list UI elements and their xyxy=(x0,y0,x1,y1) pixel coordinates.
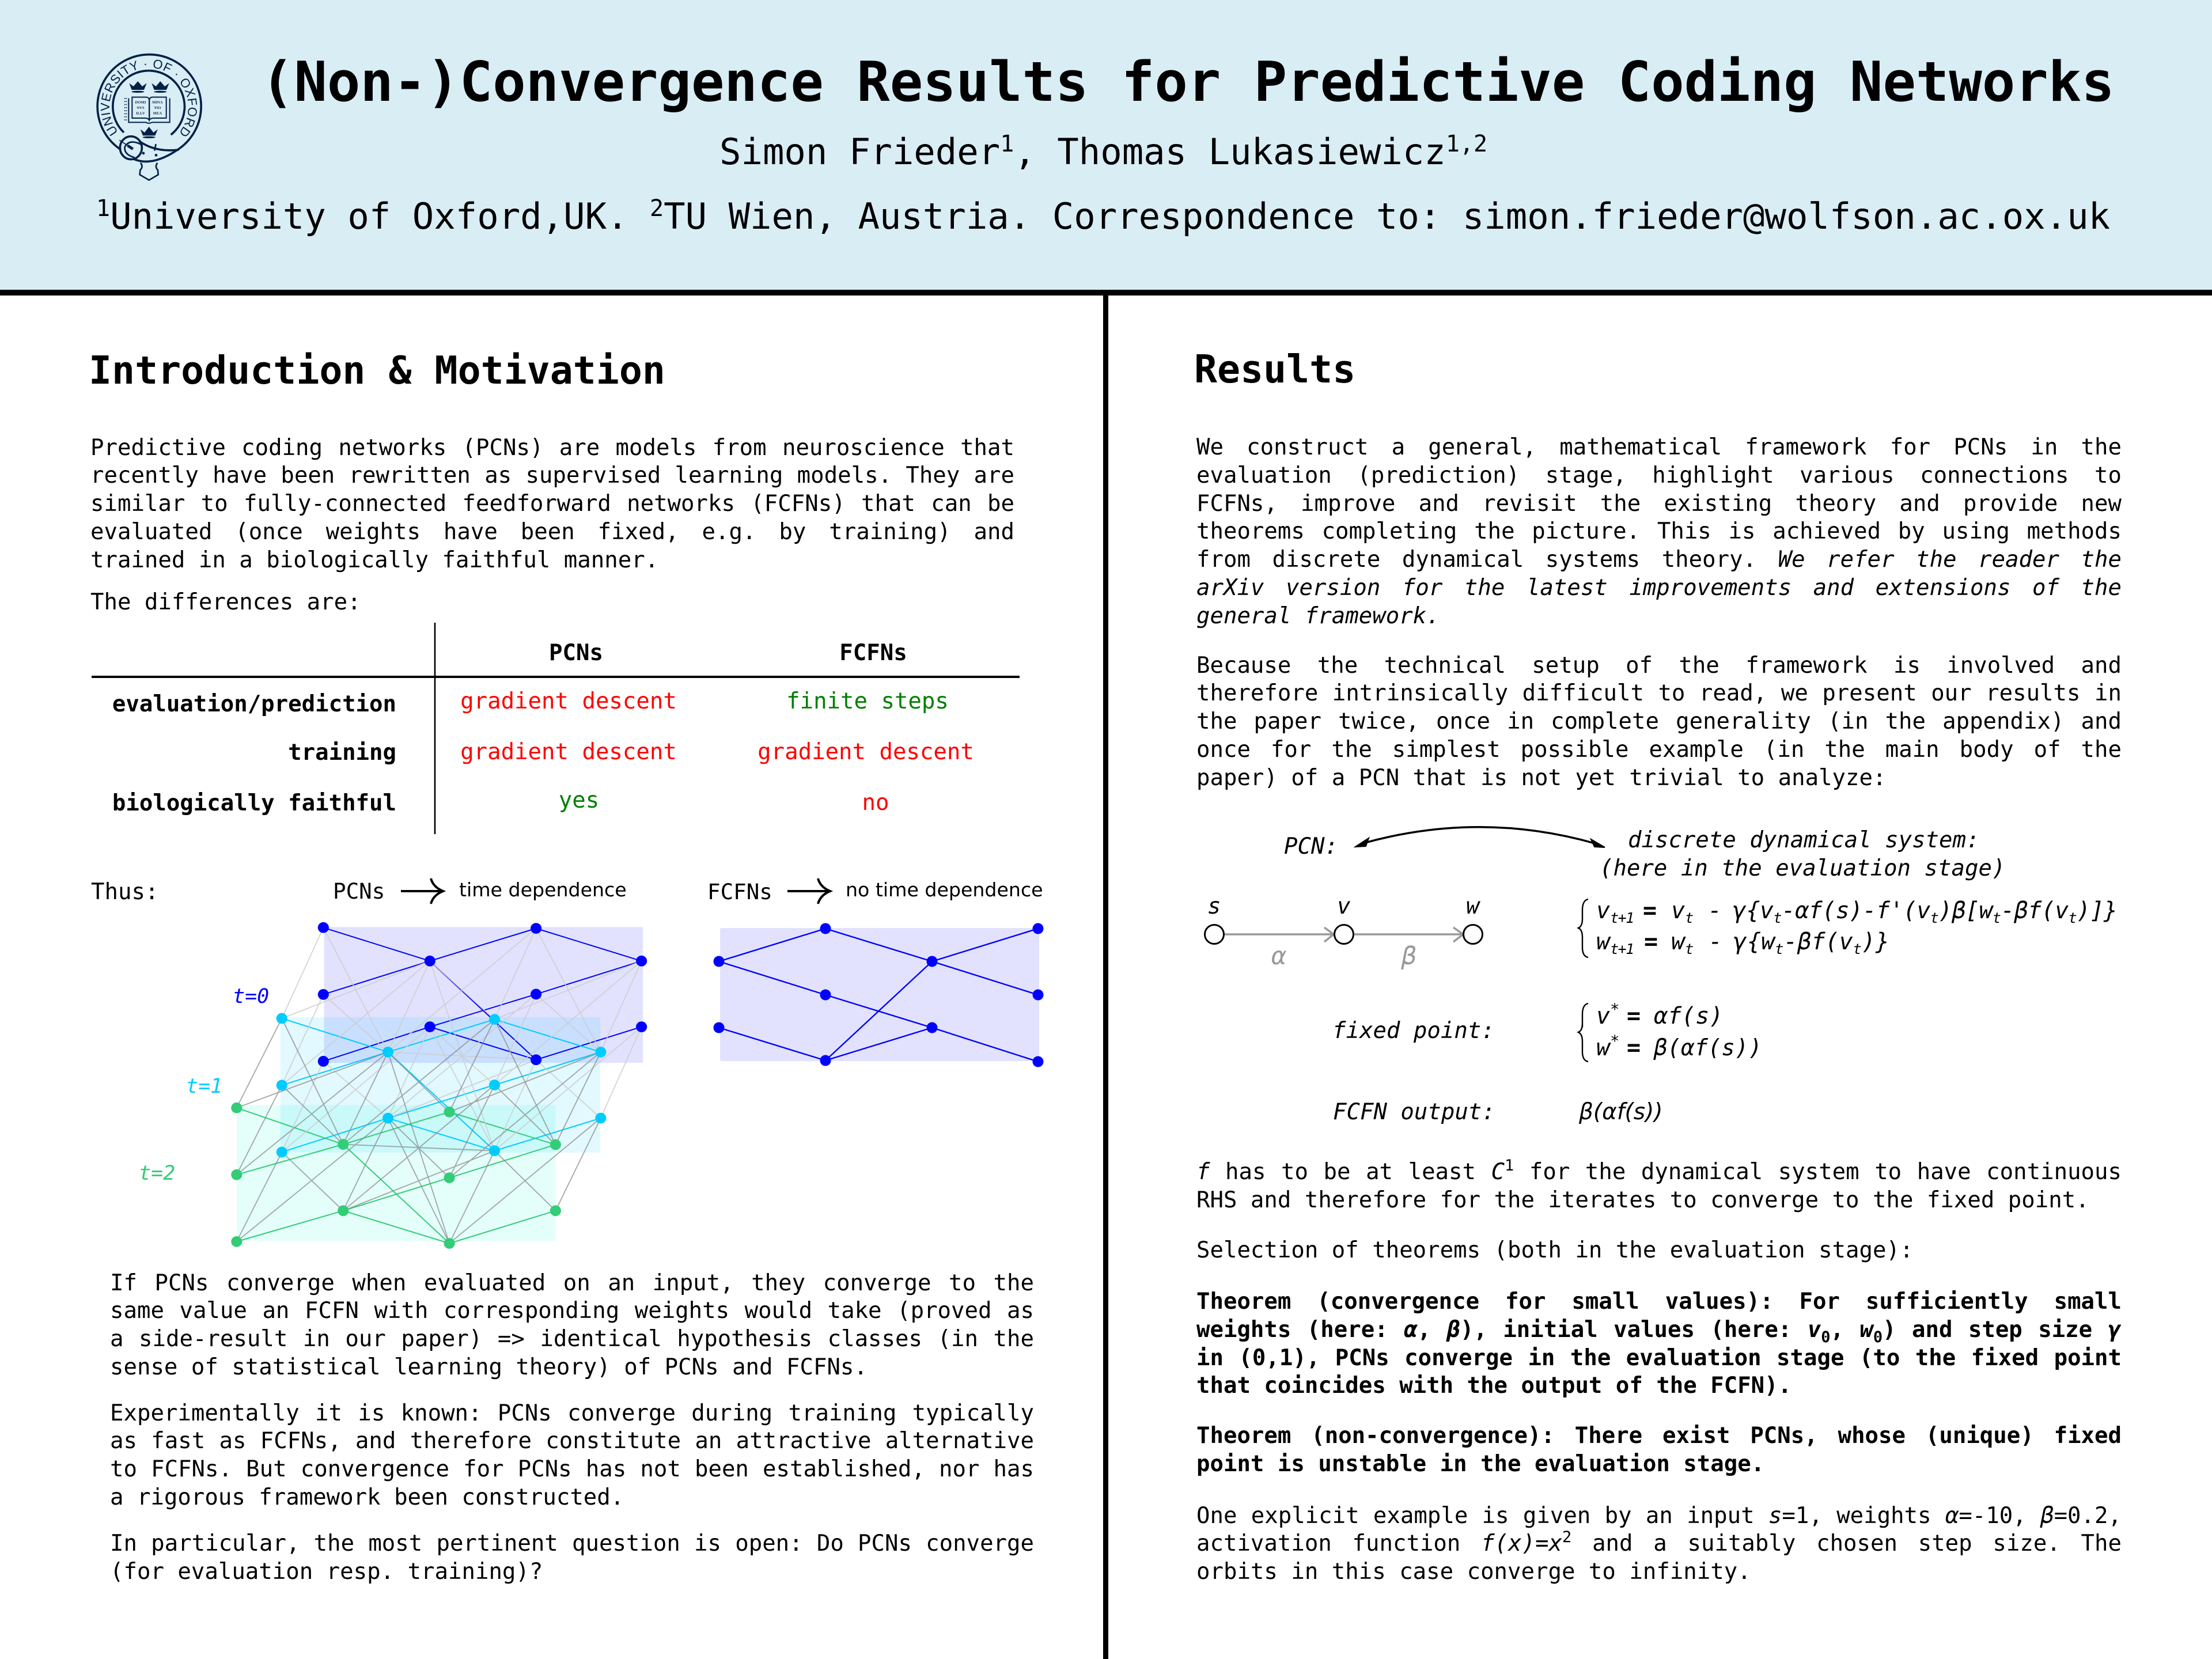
text block: identical hypothesis classes xyxy=(110,1270,1034,1380)
text block: differences intro: The differences are: xyxy=(90,589,361,615)
vertical divider xyxy=(1103,296,1108,1659)
equations: dynamical system update: -βf(v xyxy=(2001,897,2069,924)
equations: fixed point: w xyxy=(1596,1035,1610,1061)
text block: framework summary: theorems completing the picture. This is achieved by using methods xyxy=(1196,518,2122,544)
table: differences between PCNs and FCFNs: gradient descent xyxy=(460,739,677,765)
text block: framework summary: We construct a general, mathematical framework for PCNs in the xyxy=(1196,434,2122,460)
text block: experimental knowledge: a rigorous framework been constructed. xyxy=(110,1484,624,1510)
header banner xyxy=(0,0,2212,290)
authors: 1 xyxy=(1000,131,1014,157)
label: FCFNs no time dependence with arrow: FCFNs xyxy=(707,879,772,904)
logo: University of Oxford crest xyxy=(96,53,202,181)
equations: fixed point: = xyxy=(1627,1035,1641,1061)
equations: dynamical system update: w xyxy=(1671,929,1685,955)
diagram: PCN to discrete dynamical system: PCN: xyxy=(1284,834,1338,859)
diagram: s-v-w chain xyxy=(1205,893,1483,971)
text block: identical hypothesis classes: a side-result in our paper) => identical hypothesis classes (in the xyxy=(110,1326,1034,1352)
text block: technical setup: the paper twice, once in complete generality (in the appendix) and xyxy=(1196,709,2122,734)
equations: fixed point: * xyxy=(1610,1032,1619,1050)
text block: theorem convergence: that coincides with the output of the FCFN). xyxy=(1196,1373,1791,1399)
text block: technical setup xyxy=(1196,652,2122,791)
equations: dynamical system update: t xyxy=(1853,941,1862,957)
equations: dynamical system update: t xyxy=(1930,910,1939,926)
text block: experimental knowledge xyxy=(110,1400,1034,1510)
text block: technical setup: therefore intrinsically difficult to read, we present our results in xyxy=(1196,680,2122,706)
chart: PCN network unrolled in time: t=2 xyxy=(139,1162,175,1185)
text block: open question: In particular, the most pertinent question is open: Do PCNs converge xyxy=(110,1531,1034,1556)
label: PCNs time dependence with arrow: PCNs xyxy=(333,878,385,904)
equations: dynamical system update: t xyxy=(1773,910,1782,926)
text block: identical hypothesis classes: same value an FCFN with corresponding weights would take (proved as xyxy=(110,1298,1034,1324)
heading: results: Results xyxy=(1194,347,1355,392)
text block: C1 condition: RHS and therefore for the iterates to converge to the fixed point. xyxy=(1196,1187,2089,1213)
equations: dynamical system update: -αf(s)-f'(v xyxy=(1782,897,1930,924)
text block: C1 condition xyxy=(1196,1157,2122,1213)
panel: results xyxy=(1194,347,2122,1585)
label: FCFNs no time dependence with arrow xyxy=(707,878,1043,904)
table: differences between PCNs and FCFNs: gradient descent xyxy=(460,688,677,714)
table: differences between PCNs and FCFNs: training xyxy=(288,740,396,766)
table: differences between PCNs and FCFNs: gradient descent xyxy=(757,739,974,765)
equations: dynamical system update: t xyxy=(2069,910,2077,926)
table: differences between PCNs and FCFNs xyxy=(92,623,1020,834)
text block: open question xyxy=(110,1531,1034,1585)
affiliations: University of Oxford,UK. xyxy=(110,195,650,237)
text block: theorem non-convergence: Theorem (non-convergence): There exist PCNs, whose (unique) fixed xyxy=(1196,1423,2122,1449)
equations: fixed point: = xyxy=(1627,1003,1641,1029)
table: differences between PCNs and FCFNs: FCFNs xyxy=(839,640,907,666)
equations: dynamical system update: t xyxy=(1993,910,2001,926)
equations: dynamical system update xyxy=(1578,897,2118,957)
diagram: s-v-w chain: β xyxy=(1401,942,1416,971)
text block: intro paragraph: evaluated (once weights have been fixed, e.g. by training) and xyxy=(90,519,1014,545)
equations: dynamical system update: = xyxy=(1643,897,1657,924)
equation: FCFN output xyxy=(1333,1099,1663,1125)
equations: dynamical system update: w xyxy=(1596,929,1610,955)
text block: technical setup: paper) of a PCN that is not yet trivial to analyze: xyxy=(1196,765,1886,791)
logo: University of Oxford crest: DOMI xyxy=(135,101,146,105)
equations: dynamical system update: γ{v xyxy=(1733,897,1774,924)
equations: fixed point xyxy=(1332,1001,1762,1062)
logo: University of Oxford crest: UNIVERSITY · OF · OXFORD xyxy=(100,60,197,136)
equations: dynamical system update: )]} xyxy=(2077,897,2118,924)
text block: framework summary: evaluation (prediction) stage, highlight various connections to xyxy=(1196,463,2122,488)
logo: University of Oxford crest: TIO xyxy=(154,106,161,110)
text block: framework summary xyxy=(1196,434,2122,629)
equation: FCFN output: β(αf(s)) xyxy=(1578,1099,1663,1125)
text block: theorem convergence xyxy=(1196,1289,2122,1399)
text block: experimental knowledge: Experimentally it is known: PCNs converge during training typically xyxy=(110,1400,1034,1426)
table: differences between PCNs and FCFNs: evaluation/prediction xyxy=(112,691,396,717)
diagram: s-v-w chain: w xyxy=(1466,893,1481,919)
text block: framework summary: arXiv version for the latest improvements and extensions of the xyxy=(1196,575,2122,601)
chart: FCFN network xyxy=(713,923,1044,1067)
text block: theorem convergence: Theorem (convergence for small values): For sufficiently small xyxy=(1196,1289,2122,1315)
logo: University of Oxford crest: NVS xyxy=(137,106,145,110)
equations: fixed point: fixed point: xyxy=(1332,1018,1495,1044)
text block: theorem non-convergence xyxy=(1196,1423,2122,1477)
equations: fixed point: β(αf(s)) xyxy=(1653,1035,1762,1061)
text block: framework summary: general framework. xyxy=(1196,603,1440,629)
panel: introduction and motivation xyxy=(89,348,1044,1585)
affiliations: TU Wien, Austria. Correspondence to: simon.frieder@wolfson.ac.ox.uk xyxy=(664,195,2110,237)
text block: C1 condition: f has to be at least C1 for the dynamical system to have continuous xyxy=(1196,1157,2122,1185)
equations: dynamical system update: γ{w xyxy=(1733,929,1775,955)
diagram: PCN to discrete dynamical system: (here in the evaluation stage) xyxy=(1600,855,2005,881)
chart: PCN network unrolled in time: t=1 xyxy=(186,1075,222,1098)
diagram: PCN to discrete dynamical system: discrete dynamical system: xyxy=(1628,827,1979,853)
equations: dynamical system update: t+1 xyxy=(1610,910,1634,926)
equations: fixed point: v xyxy=(1596,1003,1610,1029)
label: FCFNs no time dependence with arrow: no time dependence xyxy=(846,878,1043,901)
text block: technical setup: once for the simplest possible example (in the main body of the xyxy=(1196,737,2122,763)
text block: experimental knowledge: to FCFNs. But convergence for PCNs has not been established, nor has xyxy=(110,1456,1034,1482)
equations: dynamical system update: - xyxy=(1708,897,1722,924)
text block: experimental knowledge: as fast as FCFNs, and therefore constitute an attractive alternative xyxy=(110,1428,1034,1454)
label: PCNs time dependence with arrow xyxy=(333,878,627,904)
text block: intro paragraph: recently have been rewritten as supervised learning models. They are xyxy=(90,463,1014,488)
diagram: PCN to discrete dynamical system xyxy=(1284,827,2005,881)
equations: dynamical system update: t xyxy=(1685,910,1694,926)
equations: dynamical system update: = xyxy=(1644,929,1658,955)
text block: identical hypothesis classes: If PCNs converge when evaluated on an input, they converge to the xyxy=(110,1270,1034,1296)
table: differences between PCNs and FCFNs: finite steps xyxy=(786,688,949,714)
label: PCNs time dependence with arrow: time dependence xyxy=(459,878,627,901)
text block: explicit example: orbits in this case converge to infinity. xyxy=(1196,1559,1751,1585)
equations: dynamical system update: t xyxy=(1775,941,1783,957)
chart: PCN network unrolled in time xyxy=(139,922,647,1249)
diagram: s-v-w chain: s xyxy=(1207,893,1221,919)
equation: FCFN output: FCFN output: xyxy=(1333,1099,1495,1125)
horizontal divider xyxy=(0,290,2212,296)
table: differences between PCNs and FCFNs: no xyxy=(862,790,889,816)
equations: dynamical system update: v xyxy=(1671,897,1685,924)
text block: selection of theorems: Selection of theorems (both in the evaluation stage): xyxy=(1196,1237,1913,1263)
table: differences between PCNs and FCFNs: PCNs xyxy=(549,640,603,666)
authors: , Thomas Lukasiewicz xyxy=(1014,131,1446,173)
text block: theorem non-convergence: point is unstable in the evaluation stage. xyxy=(1196,1451,1764,1477)
equations: dynamical system update: )β[w xyxy=(1938,897,1994,924)
text block: framework summary: from discrete dynamical systems theory. We refer the reader the xyxy=(1196,547,2122,573)
equations: dynamical system update: t+1 xyxy=(1610,941,1634,957)
text block: explicit example xyxy=(1196,1502,2122,1585)
diagram: s-v-w chain: α xyxy=(1271,942,1287,971)
authors: Simon Frieder xyxy=(719,131,1000,173)
equations: dynamical system update: - xyxy=(1709,929,1722,955)
equations: fixed point: αf(s) xyxy=(1654,1003,1723,1029)
chart: PCN network unrolled in time: t=0 xyxy=(233,985,269,1008)
text block: intro paragraph xyxy=(90,434,1014,573)
equations: dynamical system update: v xyxy=(1596,897,1610,924)
equations: dynamical system update: )} xyxy=(1862,929,1889,955)
diagram: s-v-w chain: v xyxy=(1337,893,1351,919)
text block: intro paragraph: trained in a biologically faithful manner. xyxy=(90,547,658,573)
text block: open question: (for evaluation resp. training)? xyxy=(110,1559,543,1585)
logo: University of Oxford crest: ILLV xyxy=(136,111,145,115)
table: differences between PCNs and FCFNs: yes xyxy=(559,787,599,813)
text block: identical hypothesis classes: sense of statistical learning theory) of PCNs and FCFNs. xyxy=(110,1354,868,1380)
text block: intro paragraph: Predictive coding networks (PCNs) are models from neuroscience that xyxy=(90,434,1014,461)
heading: introduction: Introduction & Motivation xyxy=(89,348,665,393)
logo: University of Oxford crest: MINA xyxy=(152,101,163,105)
table: differences between PCNs and FCFNs: biologically faithful xyxy=(112,790,396,816)
affiliations: 2 xyxy=(650,195,664,222)
text block: theorem convergence: in (0,1), PCNs converge in the evaluation stage (to the fixed point xyxy=(1196,1345,2122,1371)
affiliations: 1 xyxy=(96,195,110,222)
equations: dynamical system update: -βf(v xyxy=(1783,929,1853,955)
text block: explicit example: activation function f(x)=x2 and a suitably chosen step size. The xyxy=(1196,1528,2122,1556)
authors: 1,2 xyxy=(1446,131,1487,157)
text block: technical setup: Because the technical setup of the framework is involved and xyxy=(1196,652,2122,679)
label: thus: Thus: xyxy=(91,879,158,905)
text block: explicit example: One explicit example is given by an input s=1, weights α=-10, β=0.2, xyxy=(1196,1502,2122,1529)
equations: dynamical system update: t xyxy=(1685,941,1694,957)
title: (Non-)Convergence Results for Predictive Coding Networks xyxy=(261,50,2115,114)
text block: framework summary: FCFNs, improve and revisit the existing theory and provide new xyxy=(1196,491,2122,517)
equations: fixed point: * xyxy=(1610,1001,1619,1018)
text block: theorem convergence: weights (here: α, β), initial values (here: v0, w0) and step size γ xyxy=(1196,1317,2122,1346)
text block: intro paragraph: similar to fully-connected feedforward networks (FCFNs) that can be xyxy=(90,491,1014,517)
logo: University of Oxford crest: MEA xyxy=(153,111,162,115)
